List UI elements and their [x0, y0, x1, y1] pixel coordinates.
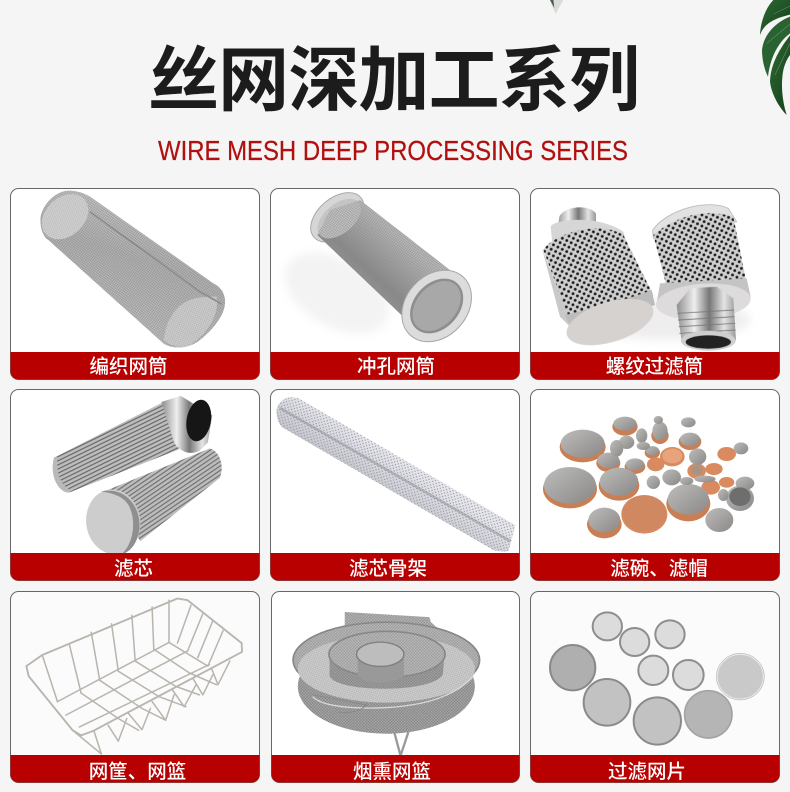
panel: 滤芯 [10, 390, 260, 580]
panel: 螺纹过滤筒 [530, 188, 780, 380]
panel: 编织网筒 [10, 185, 260, 380]
label: 滤碗、滤帽 [610, 558, 708, 580]
label: 过滤网片 [608, 761, 686, 783]
image: wire basket [26, 599, 242, 754]
panel: 网筐、网篮 [10, 592, 260, 783]
image: filter caps [543, 416, 754, 538]
panel: 过滤网片 [530, 592, 780, 783]
label: 螺纹过滤筒 [606, 356, 703, 378]
label: 烟熏网篮 [353, 761, 431, 783]
image: round smoker mesh basket [293, 612, 480, 756]
decorative monstera leaf top right [760, 0, 790, 115]
image: perforated filter core tube [277, 397, 515, 552]
title: 丝网深加工系列 [148, 42, 640, 121]
panel: 滤碗、滤帽 [530, 390, 780, 580]
image: threaded filter cylinders [542, 205, 752, 354]
decorative leaf top centre [550, 0, 563, 14]
panel: 冲孔网筒 [270, 183, 520, 380]
image: pleated filter cartridges [53, 396, 222, 558]
label: 滤芯骨架 [349, 558, 427, 580]
label: 冲孔网筒 [357, 356, 435, 378]
image: filter mesh discs [550, 612, 764, 745]
image: woven mesh tube [33, 185, 225, 347]
image: punched mesh tube [271, 183, 486, 356]
label: 网筐、网篮 [89, 761, 186, 783]
subtitle: WIRE MESH DEEP PROCESSING SERIES [158, 135, 628, 166]
label: 编织网筒 [89, 356, 168, 378]
panel: 烟熏网篮 [272, 592, 520, 783]
label: 滤芯 [114, 558, 153, 580]
panel: 滤芯骨架 [270, 390, 520, 580]
